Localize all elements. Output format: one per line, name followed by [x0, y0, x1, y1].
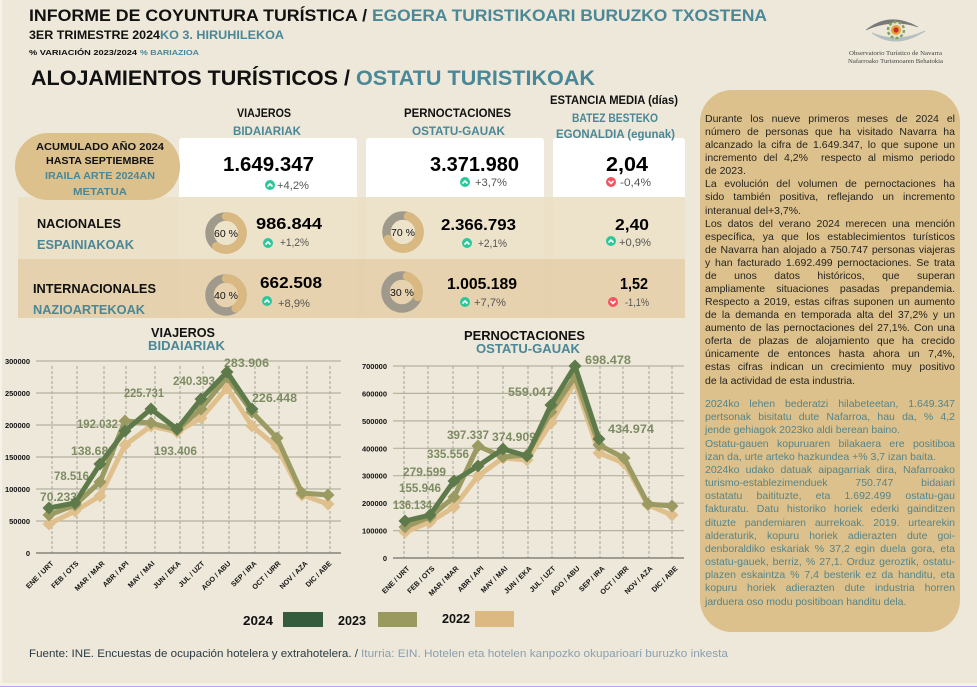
nacionales pernoctaciones value: +2,1%: [478, 238, 507, 250]
card: estancia media: [553, 138, 685, 318]
x axis labels: viajeros: FEB / OTS: [49, 559, 81, 590]
x axis labels: viajeros: JUL / UZT: [176, 559, 207, 589]
column heading: estancia media: [550, 93, 678, 141]
spanish commentary: de la demanda en temporada alta del 37,2% y un: [705, 309, 955, 321]
basque commentary: 2024ko udako datuak aipagarriak dira, Nafarroako: [705, 464, 955, 476]
column heading: pernoctaciones: OSTATU-GAUAK: [412, 124, 505, 138]
data labels: pernoctaciones: 155.946: [399, 483, 441, 495]
x axis labels: viajeros: NOV / AZA: [278, 559, 309, 591]
data labels: viajeros: 192.032: [77, 419, 118, 431]
data labels: viajeros: [40, 358, 298, 504]
chart title: pernoctaciones: [464, 328, 585, 356]
x axis labels: pernoctaciones: [380, 563, 680, 598]
nacionales estancia value: [606, 217, 651, 249]
total pernoctaciones: +3,7%: [475, 177, 507, 189]
x axis labels: pernoctaciones: DIC / ABE: [650, 564, 680, 594]
x axis labels: viajeros: SEP / IRA: [229, 559, 258, 588]
donut: internacionales pernoctaciones 30%: 30 %: [390, 287, 414, 299]
data labels: pernoctaciones: 434.974: [608, 424, 655, 436]
total pernoctaciones: [430, 154, 519, 189]
y axis labels: viajeros: 300000: [5, 357, 30, 366]
row label: nacionales: ESPAINIAKOAK: [37, 238, 134, 252]
y axis labels: pernoctaciones: 0: [383, 554, 387, 563]
donut: nacionales pernoctaciones 70%: [386, 216, 420, 249]
donut: internacionales pernoctaciones 30%: [386, 276, 418, 308]
x axis labels: pernoctaciones: MAY / MAI: [479, 564, 509, 595]
total estancia media: -0,4%: [620, 177, 651, 189]
nacionales viajeros value: [256, 216, 322, 249]
spanish commentary: Los datos del verano 2024 merecen una mención: [705, 218, 955, 230]
series 2023: pernoctaciones: [405, 377, 672, 527]
spanish commentary: oferta de plazas de alojamiento que ha crecido: [705, 335, 955, 347]
x axis labels: pernoctaciones: OCT / URR: [598, 563, 631, 596]
data labels: viajeros: 240.393: [173, 376, 215, 388]
x axis labels: pernoctaciones: JUL / UZT: [527, 564, 558, 594]
internacionales estancia value: -1,1%: [625, 297, 649, 309]
data labels: pernoctaciones: 279.599: [403, 467, 446, 479]
x axis labels: pernoctaciones: SEP / IRA: [577, 564, 606, 593]
basque commentary: izan da, urte arteko hazkundea +% 3,7 izan baita.: [705, 451, 936, 463]
variation note: % VARIACIÓN 2023/2024: [29, 48, 138, 57]
spanish commentary: de 2023.: [705, 165, 746, 177]
x axis labels: viajeros: OCT / URR: [250, 558, 283, 591]
logo: Observatorio Turístico de Navarra: Observatorio Turístico de Navarra: [849, 50, 942, 57]
line chart: pernoctaciones: [362, 355, 684, 598]
data labels: viajeros: 226.448: [252, 393, 298, 405]
data labels: pernoctaciones: 335.556: [427, 449, 469, 461]
basque commentary: [704, 398, 955, 608]
data labels: viajeros: 193.406: [154, 446, 197, 458]
x axis labels: viajeros: [24, 558, 334, 593]
legend: 2023: [338, 614, 366, 628]
section heading: ALOJAMIENTOS TURÍSTICOS /: [31, 67, 350, 90]
y axis labels: pernoctaciones: [362, 362, 387, 563]
spanish commentary: Durante los nueve primeros meses de 2024 el: [705, 113, 955, 125]
spanish commentary: interanual del+3,7%.: [705, 205, 801, 217]
x axis labels: viajeros: DIC / ABE: [304, 559, 334, 589]
nacionales pernoctaciones value: 2.366.793: [441, 217, 516, 234]
basque commentary: ostatu-gauek, berriz, % 27,1. Orduz geroztik, ostatu-: [705, 556, 955, 568]
y axis labels: pernoctaciones: 500000: [362, 417, 387, 426]
spanish commentary: de Navarra han alojado a 750.747 personas viajeras: [705, 244, 955, 256]
spanish commentary: y han facturado 1.692.499 pernoctaciones. Se trata: [705, 257, 955, 269]
x axis labels: viajeros: AGO / ABU: [199, 559, 232, 592]
spanish commentary: de unos datos históricos, que superan: [705, 270, 955, 282]
basque commentary: jarduera oso modu positiboan handitu dela.: [705, 596, 906, 608]
data labels: pernoctaciones: 559.047: [508, 387, 553, 399]
data labels: pernoctaciones: 397.337: [447, 430, 489, 442]
donut: nacionales viajeros 60%: [210, 216, 243, 250]
basque commentary: kopuru horiek adierazten dute industria horren: [705, 582, 955, 594]
source footer: [29, 648, 729, 660]
total viajeros: [223, 154, 314, 192]
basque commentary: denboraldiko eskariak % 37,2 egin duela gora, eta: [705, 543, 955, 555]
data labels: viajeros: 70.233: [40, 492, 77, 504]
period subtitle: [29, 28, 284, 42]
band: internacionales: [18, 259, 685, 318]
basque commentary: alderaturik, kopuru horiek adierazten dute goi-: [705, 530, 955, 542]
chart title: viajeros: [148, 325, 226, 353]
row label: internacionales: [33, 282, 156, 317]
basque commentary: fakturatu. Datu historiko horiek ederki gainditzen: [705, 503, 955, 515]
chart title: pernoctaciones: OSTATU-GAUAK: [476, 341, 581, 356]
data labels: pernoctaciones: 698.478: [585, 355, 632, 367]
logo: Observatorio Turístico de Navarra: [848, 20, 943, 65]
x axis labels: viajeros: MAY / MAI: [126, 559, 156, 590]
series 2023: viajeros: [49, 377, 328, 515]
column heading: viajeros: BIDAIARIAK: [233, 124, 301, 138]
series 2024: viajeros: [49, 372, 252, 508]
main title: INFORME DE COYUNTURA TURÍSTICA /: [29, 6, 367, 25]
basque commentary: plazen eskaintza % 7,4 besterik ez da handitu, eta: [705, 569, 955, 581]
y axis labels: viajeros: 100000: [5, 485, 30, 494]
y axis labels: pernoctaciones: 100000: [362, 527, 387, 536]
total estancia media: 2,04: [606, 154, 649, 176]
column heading: pernoctaciones: [404, 106, 511, 138]
nacionales viajeros value: +1,2%: [280, 237, 309, 249]
x axis labels: viajeros: ENE / URT: [24, 559, 56, 591]
column heading: viajeros: [233, 106, 301, 138]
spanish commentary: únicamente de entonces hasta ahora un 7,4%,: [705, 348, 955, 360]
spanish commentary: ampliamente situaciones pasadas prepandemia.: [705, 283, 955, 295]
donut: nacionales viajeros 60%: 60 %: [214, 228, 238, 240]
x axis labels: pernoctaciones: ENE / URT: [380, 564, 412, 596]
row label: nacionales: [37, 217, 134, 252]
basque commentary: dituzte pandemiaren aurrekoak. 2019. urtearekin: [705, 517, 955, 529]
legend: 2024: [243, 614, 273, 628]
x axis labels: viajeros: JUN / EKA: [151, 559, 182, 591]
card: pernoctaciones: [366, 138, 544, 318]
row label: nacionales: NACIONALES: [37, 217, 121, 231]
data labels: viajeros: 138.682: [71, 446, 115, 458]
spanish commentary: específica, ya que los establecimientos turísticos: [705, 231, 955, 243]
data labels: viajeros: 283.906: [224, 358, 269, 370]
chart title: pernoctaciones: PERNOCTACIONES: [464, 328, 585, 343]
internacionales pernoctaciones value: [447, 276, 517, 309]
row label: internacionales: INTERNACIONALES: [33, 282, 156, 296]
section heading: OSTATU TURISTIKOAK: [356, 67, 595, 90]
spanish commentary: de la actividad de esta industria.: [705, 375, 855, 387]
main title: EGOERA TURISTIKOARI BURUZKO TXOSTENA: [372, 6, 767, 25]
series 2024: pernoctaciones: [405, 366, 599, 521]
spanish commentary: incremento del 4,2% respecto al mismo periodo: [705, 152, 955, 164]
internacionales viajeros value: +8,9%: [278, 298, 310, 310]
x axis labels: viajeros: MAR / MAR: [73, 558, 107, 593]
column heading: estancia media: EGONALDIA (egunak): [556, 127, 675, 141]
spanish commentary: La evolución del volumen de pernoctaciones ha: [705, 178, 955, 190]
y axis labels: pernoctaciones: 700000: [362, 362, 387, 371]
series 2022: viajeros: [49, 388, 328, 524]
basque commentary: jende gehiagok 2023ko aldi berean baino.: [705, 424, 900, 436]
data labels: viajeros: 78.516: [54, 471, 89, 483]
internacionales estancia value: [608, 276, 649, 309]
total estancia media: [606, 154, 651, 189]
pill: acumulado año 2024: IRAILA ARTE 2024AN: [45, 170, 155, 182]
pill: acumulado año 2024: ACUMULADO AÑO 2024: [36, 140, 164, 153]
donut: internacionales viajeros 40%: [210, 278, 242, 312]
legend: [243, 611, 514, 628]
chart title: viajeros: BIDAIARIAK: [148, 338, 226, 353]
spanish commentary: sido también positiva, reflejando un incremento: [705, 191, 955, 203]
basque commentary: 2024ko lehen bederatzi hilabeteetan, 1.649.347: [705, 398, 955, 410]
source footer: Fuente: INE. Encuestas de ocupación hotelera y extrahotelera. /: [29, 648, 359, 660]
column heading: estancia media: ESTANCIA MEDIA (días): [550, 93, 678, 107]
pill: acumulado año 2024: METATUA: [73, 186, 127, 198]
pill: acumulado año 2024: [15, 133, 180, 200]
y axis labels: viajeros: 50000: [9, 517, 30, 526]
data labels: pernoctaciones: 136.134: [393, 500, 433, 512]
data labels: pernoctaciones: [393, 355, 655, 512]
band: nacionales: [18, 197, 685, 259]
column heading: pernoctaciones: PERNOCTACIONES: [404, 106, 511, 120]
x axis labels: viajeros: ABR / API: [101, 559, 130, 589]
basque commentary: ostatatu baitituzte, eta 1.692.499 ostatu-gau: [705, 490, 955, 502]
card: viajeros: [179, 138, 357, 318]
y axis labels: viajeros: 150000: [5, 453, 30, 462]
donut: internacionales viajeros 40%: 40 %: [214, 290, 238, 302]
basque commentary: pertsonak bisitatu dute Nafarroa, hau da, % 4,2: [705, 411, 955, 423]
column heading: viajeros: VIAJEROS: [237, 106, 291, 120]
spanish commentary: Respecto a 2019, estas cifras suponen un aumento: [705, 296, 955, 308]
pill: acumulado año 2024: HASTA SEPTIEMBRE: [46, 155, 154, 167]
y axis labels: pernoctaciones: 400000: [362, 444, 387, 453]
x axis labels: pernoctaciones: AGO / ABU: [548, 564, 581, 597]
data labels: viajeros: 225.731: [124, 388, 165, 400]
y axis labels: viajeros: [5, 357, 30, 558]
basque commentary: Ostatu-gauen kopuruaren bilakaera ere positiboa: [705, 438, 955, 450]
y axis labels: pernoctaciones: 200000: [362, 499, 387, 508]
internacionales pernoctaciones value: +7,7%: [474, 297, 506, 309]
spanish commentary: aumento de las pernoctaciones del 27,1%. Con una: [705, 322, 955, 334]
column heading: estancia media: BATEZ BESTEKO: [572, 111, 658, 125]
x axis labels: pernoctaciones: JUN / EKA: [502, 564, 533, 596]
x axis labels: pernoctaciones: MAR / MAR: [427, 563, 461, 598]
row label: internacionales: NAZIOARTEKOAK: [33, 303, 145, 317]
series 2022: pernoctaciones: [405, 382, 672, 532]
legend: 2022: [442, 612, 470, 626]
basque commentary: turismo-establezimenduek 750.747 bidaiari: [705, 477, 955, 489]
chart title: viajeros: VIAJEROS: [151, 325, 215, 340]
total viajeros: +4,2%: [277, 180, 309, 192]
total pernoctaciones: 3.371.980: [430, 154, 519, 176]
nacionales estancia value: +0,9%: [619, 237, 651, 249]
internacionales estancia value: 1,52: [620, 276, 648, 293]
variation note: [29, 48, 200, 57]
logo: Observatorio Turístico de Navarra: Nafarroako Turismoaren Behatokia: [848, 58, 943, 65]
data labels: pernoctaciones: 374.909: [492, 432, 536, 444]
spanish commentary: [705, 113, 955, 387]
x axis labels: pernoctaciones: FEB / OTS: [405, 564, 437, 595]
y axis labels: viajeros: 0: [26, 549, 30, 558]
variation note: % BARIAZIOA: [140, 48, 200, 57]
text panel: [700, 90, 960, 632]
internacionales viajeros value: [260, 275, 322, 310]
spanish commentary: estas cifras indican un crecimiento muy positivo: [705, 361, 955, 373]
period subtitle: 3ER TRIMESTRE 2024: [29, 28, 160, 42]
nacionales estancia value: 2,40: [615, 217, 649, 234]
nacionales pernoctaciones value: [441, 217, 516, 250]
x axis labels: pernoctaciones: ABR / API: [456, 564, 485, 594]
donut: nacionales pernoctaciones 70%: 70 %: [391, 227, 415, 239]
x axis labels: pernoctaciones: NOV / AZA: [623, 564, 654, 596]
line chart: viajeros: [5, 357, 341, 593]
main title: [29, 6, 767, 25]
internacionales viajeros value: 662.508: [260, 275, 322, 292]
total viajeros: 1.649.347: [223, 154, 314, 176]
y axis labels: pernoctaciones: 600000: [362, 389, 387, 398]
y axis labels: viajeros: 250000: [5, 389, 30, 398]
internacionales pernoctaciones value: 1.005.189: [447, 276, 517, 293]
section heading: [31, 67, 595, 90]
y axis labels: viajeros: 200000: [5, 421, 30, 430]
source footer: Iturria: EIN. Hotelen eta hotelen kanpozko okuparioari buruzko inkesta: [361, 648, 729, 660]
period subtitle: KO 3. HIRUHILEKOA: [160, 28, 284, 42]
spanish commentary: alcanzado la cifra de 1.649.347, lo que supone un: [705, 139, 955, 151]
y axis labels: pernoctaciones: 300000: [362, 472, 387, 481]
spanish commentary: número de personas que ha visitado Navarra ha: [705, 126, 955, 138]
nacionales viajeros value: 986.844: [256, 216, 322, 233]
